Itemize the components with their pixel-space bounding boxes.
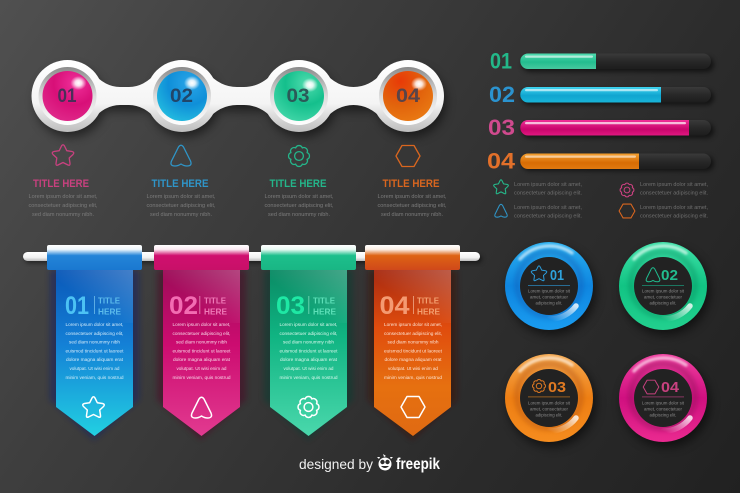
ribbon 04 text: volutpat. Ut wisi enim ad [388,366,438,371]
legend text 1: consectetuer adipiscing elit. [514,190,582,196]
ribbon 02: TITLE [204,296,226,306]
legend text 4: Lorem ipsum dolor sit amet, [640,205,708,211]
text block 02: consectetuer adipiscing elit, [146,203,216,209]
text block 04: Lorem ipsum dolor sit amet, [378,194,446,200]
ribbon 01 text: Lorem ipsum dolor sit amet, [66,322,124,327]
ribbon 01 [47,245,142,440]
bar 04 [487,148,714,174]
bar 01 [490,48,714,74]
text block 02: Lorem ipsum dolor sit amet, [146,194,216,200]
legend: progress bars key [494,180,708,220]
text block 04: consectetuer adipiscing elit, [378,203,446,209]
text block 03 [264,194,334,218]
panel: hanging ribbons [23,245,482,440]
footer: designed by freepik [299,454,440,473]
ribbon 02: 02 [169,292,198,320]
icon: white hexagon [401,396,425,418]
cap 01 [47,245,142,270]
ball 02: 02 [170,86,193,107]
ribbon 03 text: consectetuer adipiscing elit, [280,331,338,336]
text block 01: sed diam nonummy nibh. [32,212,94,218]
ribbon 02: HERE [204,306,227,316]
ring 03 orange: adipiscing elit. [536,412,562,418]
ribbon 02 text: sed diam nonummy nibh [176,340,227,344]
bar 03: 03 [488,115,515,140]
ball 03: 03 [286,86,310,107]
ring 03 orange: Lorem ipsum dolor sit [528,400,571,406]
ribbon 04 text: euismod tincidunt ut laoreet [384,348,443,354]
ribbon 02 text [172,322,231,380]
ring 03 orange [505,354,596,447]
icon: gear [289,146,309,166]
ribbon 04 text: dolore magna aliquam erat [384,357,442,362]
ring 01 blue: amet, consectetuer [530,294,568,300]
rod [23,252,482,263]
text block 03: sed diam nonummy nibh. [268,212,330,218]
ribbon 03 text: volutpat. Ut wisi enim ad [284,366,334,371]
icon: triangle [171,145,191,166]
ribbon 02 [154,245,249,440]
column 01: star, title, text [28,145,98,218]
ring 04 pink: amet, consectetuer [644,406,682,412]
ribbon 04 text: Lorem ipsum dolor sit amet, [384,322,442,327]
text block 04: sed diam nonummy nibh. [381,212,443,218]
bar 03 [488,115,714,140]
title 03: TITLE HERE [270,178,326,190]
ring 04 pink: 04 [661,380,679,396]
footer: designed by freepik: designed by [299,456,373,472]
ribbon 01 text: volutpat. Ut wisi enim ad [70,366,120,371]
panel: white connector timeline [32,60,446,137]
icon: white gear [298,397,319,417]
ribbon 01 text: euismod tincidunt ut laoreet [66,348,124,354]
ribbon 03: HERE [313,306,336,316]
panel: progress bars [487,48,714,174]
title 02: TITLE HERE [152,178,208,190]
text block 02 [146,194,216,218]
ball 02 [153,67,211,125]
ribbon 04 text: minim veniam, quis nostrud [384,375,442,380]
icon: legend gear [620,183,634,197]
ribbon 03 [261,245,356,440]
ring 01 blue: Lorem ipsum dolor sit [528,288,571,294]
text block 02: sed diam nonummy nibh. [150,212,212,218]
bar 04: 04 [487,148,516,174]
legend text 1 [514,182,582,196]
cap 02 [154,245,249,270]
ring 03 orange: amet, consectetuer [530,406,568,412]
ribbon 02 text: euismod tincidunt ut laoreet [172,348,231,354]
legend text 3: consectetuer adipiscing elit. [640,190,708,196]
legend text 2 [514,205,582,220]
legend text 4: consectetuer adipiscing elit. [640,214,708,220]
column 02: triangle, title, text [146,145,216,218]
ribbon 01 text: consectetuer adipiscing elit, [66,331,124,336]
ball 04 [379,67,437,125]
text block 03: Lorem ipsum dolor sit amet, [264,194,334,200]
icon: white triangle [191,397,212,418]
ribbon 02 text: consectetuer adipiscing elit, [172,331,230,336]
text block 01 [28,194,98,218]
ribbon 04 text [384,322,443,380]
ribbon 01 text [66,322,124,380]
footer: designed by freepik: freepik [396,456,440,473]
icon: legend hexagon [619,204,635,218]
ring 01 blue: 01 [550,268,564,284]
ring 02 green: adipiscing elit. [650,300,676,306]
text block 01: Lorem ipsum dolor sit amet, [28,194,98,200]
icon: legend star [494,180,508,194]
ribbon 03 text: Lorem ipsum dolor sit amet, [280,322,338,327]
ribbon 01: HERE [98,306,121,316]
legend text 4 [640,205,708,220]
icon: hexagon [396,146,420,166]
ring 02 green: Lorem ipsum dolor sit [642,288,685,294]
icon: legend triangle [495,204,507,217]
ring 01 blue [505,242,596,335]
icon: star [52,145,74,165]
ball 01 [38,67,96,125]
ribbon 02 text: minim veniam, quis nostrud [172,375,231,380]
ring 04 pink: Lorem ipsum dolor sit [642,400,685,406]
cap 04 [365,245,460,270]
cap 03 [261,245,356,270]
text block 01: consectetuer adipiscing elit, [28,203,98,209]
ribbon 03: 03 [276,292,305,320]
ball 01: 01 [58,86,77,107]
ribbon 03: TITLE [313,296,335,306]
ribbon 01 text: dolore magna aliquam erat [66,357,124,362]
legend text 2: Lorem ipsum dolor sit amet, [514,205,582,211]
ring 02 green [619,242,710,335]
ball 04: 04 [396,86,420,107]
ribbon 02 text: Lorem ipsum dolor sit amet, [172,322,230,327]
column 03: gear, title, text [264,146,334,218]
bar 02: 02 [489,82,515,107]
ribbon 03 text: sed diam nonummy nibh [283,340,334,344]
ribbon 04 text: sed diam nonummy nibh [388,340,439,344]
ribbon 04: HERE [417,306,440,316]
ribbon 01 text: sed diam nonummy nibh [69,340,120,344]
ribbon 03 text: dolore magna aliquam erat [280,357,338,362]
ribbon 04 text: consectetuer adipiscing elit, [384,331,442,336]
ribbon 04 [365,245,460,440]
title 01: TITLE HERE [33,178,89,190]
ribbon 03 text: minim veniam, quis nostrud [280,375,338,380]
ring 04 pink: adipiscing elit. [650,412,676,418]
column 04: hexagon, title, text [378,146,446,218]
text block 04 [378,194,446,218]
ribbon 01: 01 [65,292,89,320]
ring 02 green: 02 [661,268,678,284]
ribbon 01: TITLE [98,296,120,306]
ring 03 orange: 03 [548,380,566,396]
ring 04 pink [619,354,710,447]
ring 01 blue: adipiscing elit. [536,300,562,306]
ball 03 [270,67,328,125]
ribbon 03 text [280,322,338,380]
icon: freepik mascot [377,454,393,470]
ring 02 green: amet, consectetuer [644,294,682,300]
legend text 1: Lorem ipsum dolor sit amet, [514,182,582,188]
ribbon 01 text: minim veniam, quis nostrud [66,375,124,380]
legend text 2: consectetuer adipiscing elit. [514,214,582,220]
bar 01: 01 [490,48,512,74]
legend text 3: Lorem ipsum dolor sit amet, [640,182,708,188]
bar 02 [489,82,714,107]
ribbon 02 text: volutpat. Ut wisi enim ad [176,366,227,371]
legend text 3 [640,182,708,196]
ribbon 04: 04 [380,292,410,320]
title 04: TITLE HERE [382,178,440,190]
icon: white star [83,397,104,417]
ribbon 02 text: dolore magna aliquam erat [173,357,231,362]
ribbon 03 text: euismod tincidunt ut laoreet [280,348,338,354]
ribbon 04: TITLE [417,296,439,306]
text block 03: consectetuer adipiscing elit, [264,203,334,209]
